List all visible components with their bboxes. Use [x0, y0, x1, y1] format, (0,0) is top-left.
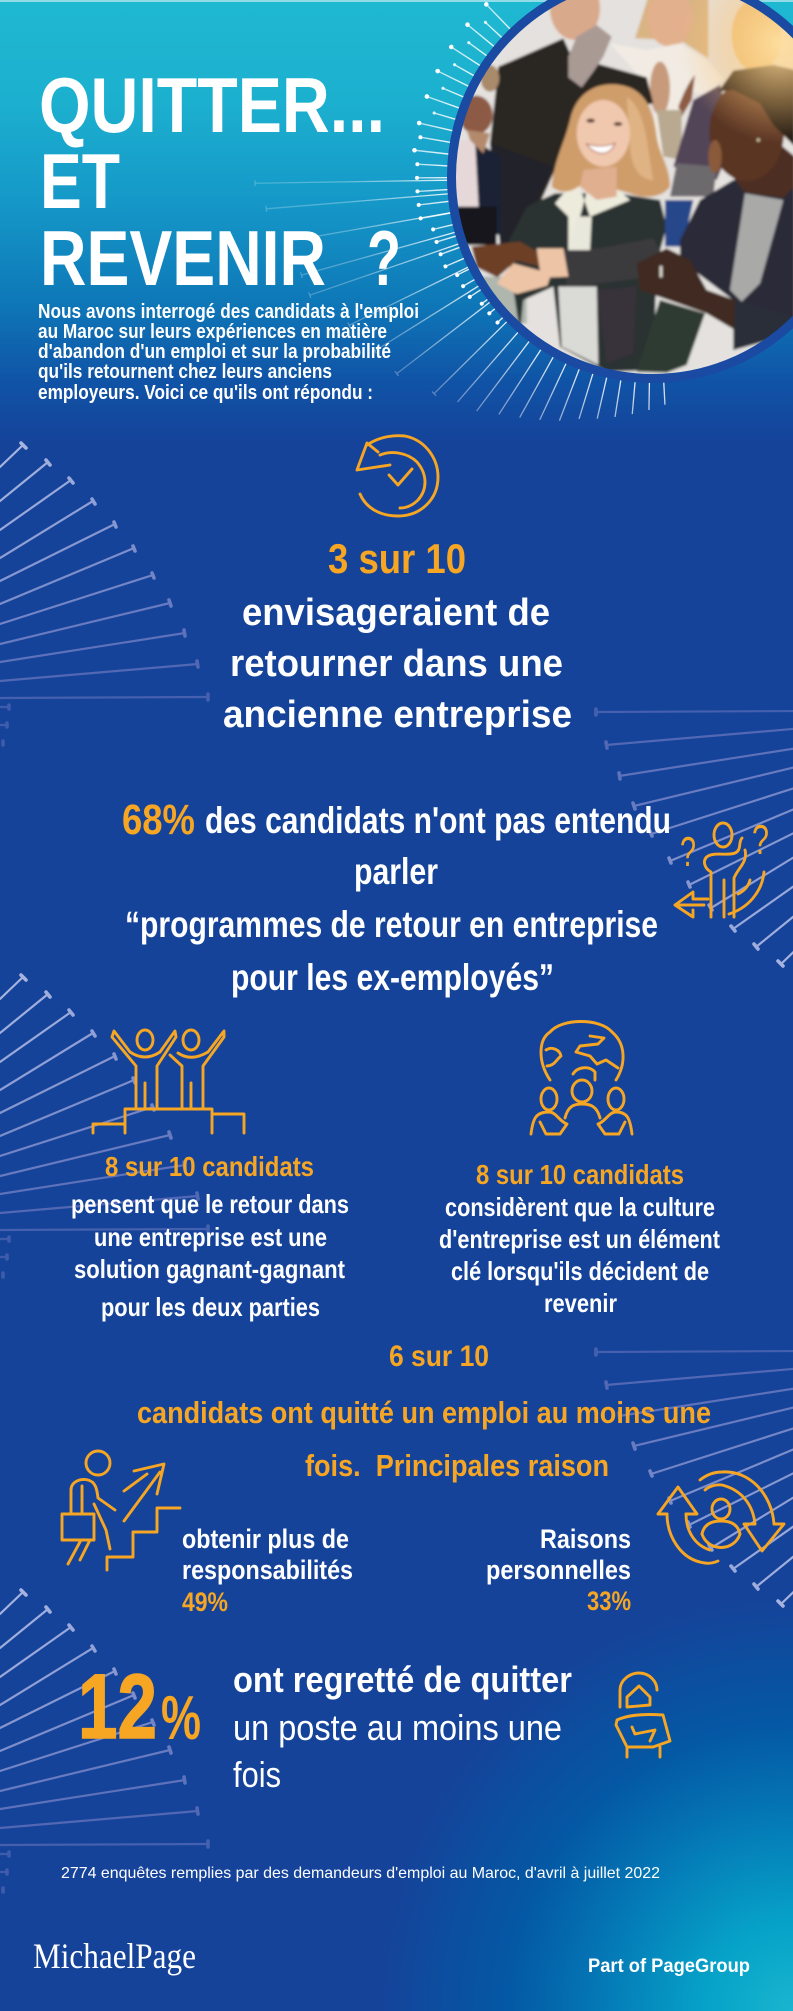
stat: 68% [122, 796, 671, 998]
reason: raisons personnelles: personnelles [486, 1555, 631, 1585]
stat: 3 sur 10: envisageraient de [242, 592, 550, 634]
stat: 6 sur 10: fois. Principales raison [305, 1448, 609, 1483]
reason: obtenir plus de responsabilités: obtenir plus de [182, 1524, 349, 1554]
back woman [610, 0, 723, 160]
intro text: d'abandon d'un emploi et sur la probabilité [38, 341, 391, 363]
block: 8 sur 10 candidats, right: clé lorsqu'ils décident de [451, 1256, 709, 1286]
reason: obtenir plus de responsabilités [182, 1524, 353, 1617]
stat: 3 sur 10: ancienne entreprise [223, 694, 572, 736]
stat: 3 sur 10: retourner dans une [230, 643, 563, 685]
intro text [38, 301, 419, 404]
block: 8 sur 10 candidats, right: revenir [544, 1288, 617, 1318]
stat: 3 sur 10 [223, 535, 572, 736]
title: ET [40, 137, 120, 225]
block: 8 sur 10 candidats, right: d'entreprise est un élément [439, 1224, 720, 1254]
reason: obtenir plus de responsabilités: responsabilités [182, 1555, 353, 1585]
title: REVENIR [40, 214, 326, 302]
intro text: au Maroc sur leurs expériences en matière [38, 321, 387, 343]
header sunburst rays [255, 1, 665, 421]
block: 8 sur 10 candidats, left: solution gagnant-gagnant [74, 1254, 345, 1284]
icon: person climbing stairs [62, 1451, 180, 1570]
icon: person with question marks: ? [680, 828, 696, 875]
icon: two people on podium [93, 1030, 244, 1133]
stat: 68%: “programmes de retour en entreprise [125, 904, 658, 945]
intro text: employeurs. Voici ce qu'ils ont répondu : [38, 382, 373, 404]
stat: 6 sur 10 [137, 1340, 711, 1483]
text: regret: un poste au moins une [233, 1707, 562, 1748]
right man [637, 65, 793, 373]
stat: 6 sur 10: candidats ont quitté un emploi au moins une [137, 1395, 711, 1430]
intro text: Nous avons interrogé des candidats à l'emploi [38, 301, 419, 323]
intro text: qu'ils retournent chez leurs anciens [38, 361, 332, 383]
background ray bursts [0, 443, 793, 1892]
left person and hand [453, 65, 502, 245]
stat: 12%: 12 [78, 1656, 157, 1758]
block: 8 sur 10 candidats, left: une entreprise est une [94, 1222, 327, 1252]
icon: globe with people [531, 1022, 632, 1134]
block: 8 sur 10 candidats, right: considèrent que la culture [445, 1192, 715, 1222]
block: 8 sur 10 candidats, left: 8 sur 10 candidats [105, 1151, 314, 1182]
stat: 3 sur 10: 3 sur 10 [328, 535, 466, 582]
text: regret: ont regretté de quitter [233, 1659, 572, 1700]
block: 8 sur 10 candidats, right [439, 1159, 720, 1318]
handshake [472, 242, 568, 294]
stat: 68%: des candidats n'ont pas entendu [205, 800, 671, 841]
icon: person with question marks: ? [752, 816, 769, 863]
central woman [507, 84, 670, 372]
stat: 12%: % [161, 1684, 201, 1753]
reason: obtenir plus de responsabilités: 49% [182, 1587, 228, 1617]
logo: Part of PageGroup: Part of PageGroup [588, 1956, 750, 1977]
block: 8 sur 10 candidats, left [71, 1151, 349, 1322]
stat: 6 sur 10: 6 sur 10 [389, 1340, 489, 1373]
text: regret [233, 1659, 572, 1795]
icon: person with question marks [675, 816, 769, 917]
reason: raisons personnelles: Raisons [540, 1524, 631, 1554]
block: 8 sur 10 candidats, right: 8 sur 10 candidats [476, 1159, 684, 1190]
header panel [38, 0, 793, 421]
back left man in dark suit [490, 0, 653, 247]
logo: Michael Page: MichaelPage [33, 1936, 196, 1976]
stat: 68%: pour les ex-employés” [231, 957, 554, 998]
icon: person with circular arrows [658, 1472, 784, 1563]
block: 8 sur 10 candidats, left: pensent que le retour dans [71, 1189, 349, 1219]
stat: 68%: 68% [122, 796, 195, 844]
reason: raisons personnelles: 33% [587, 1586, 631, 1616]
source note: 2774 enquêtes remplies par des demandeurs d'emploi au Maroc, d'avril à juillet 2022 [61, 1865, 660, 1882]
block: 8 sur 10 candidats, left: pour les deux parties [101, 1292, 320, 1322]
back right man [670, 0, 782, 197]
icon: clock with return arrow [357, 436, 438, 516]
title: ? [367, 214, 401, 302]
reason: raisons personnelles [486, 1524, 631, 1616]
title [39, 61, 401, 302]
text: regret: fois [233, 1754, 281, 1795]
title: QUITTER... [39, 61, 385, 149]
photo: people shaking hands [437, 0, 793, 407]
icon: seated person [616, 1673, 670, 1757]
stat: 68%: parler [354, 851, 438, 892]
